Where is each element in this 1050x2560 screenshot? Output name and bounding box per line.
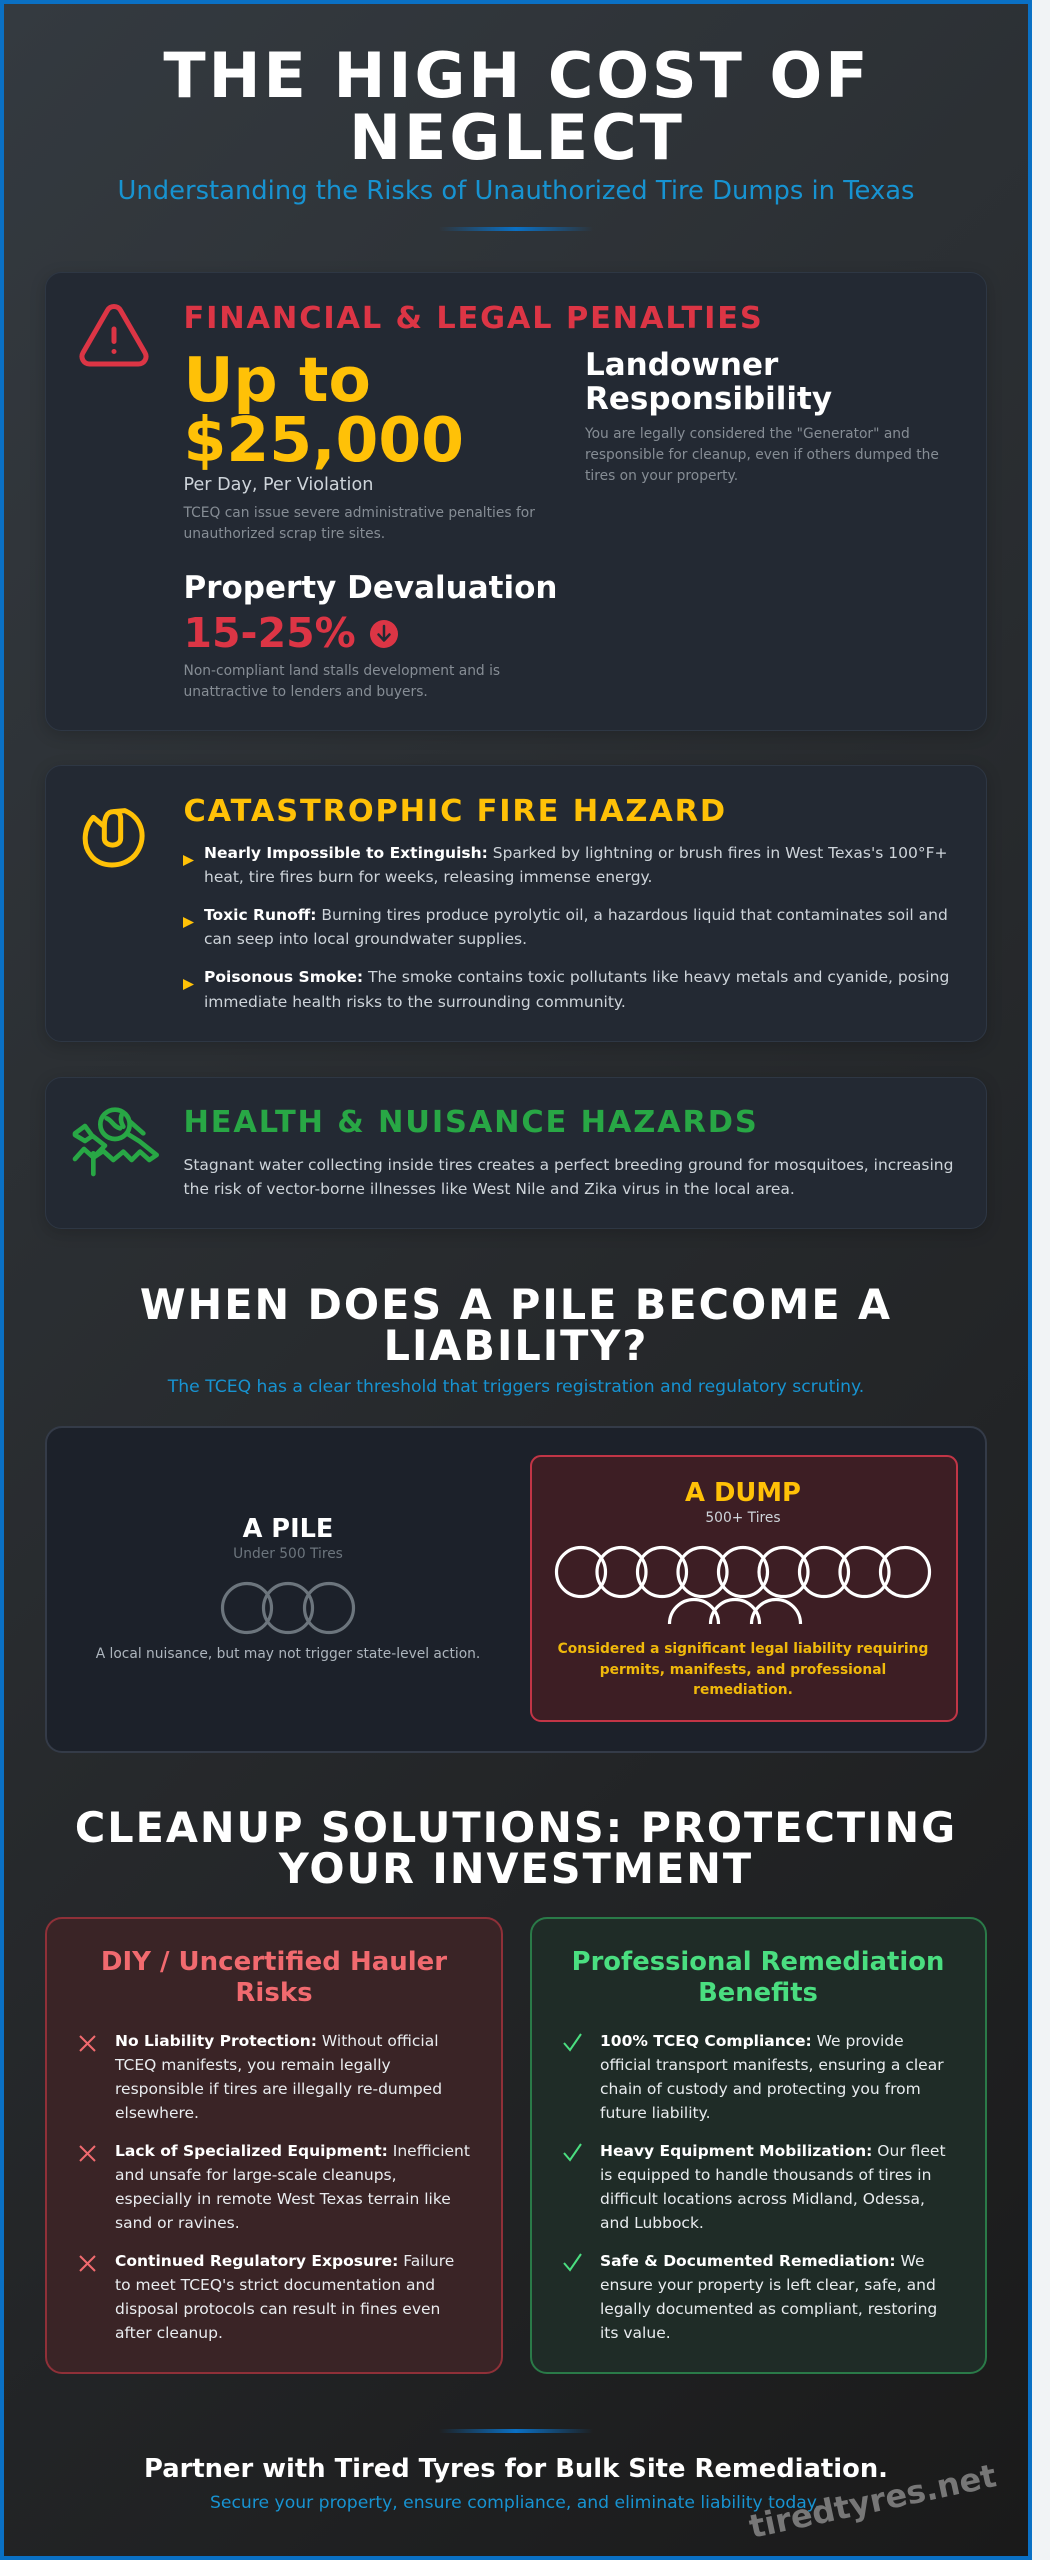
heading: financial and legal penalties: FINANCIAL & LEGAL PENALTIES bbox=[184, 301, 764, 336]
title bbox=[163, 39, 871, 174]
bullet: poisonous smoke bbox=[183, 968, 949, 1011]
subheading: threshold: The TCEQ has a clear threshold that triggers registration and regulatory scrutiny. bbox=[167, 1377, 864, 1397]
heading: professional benefits: Benefits bbox=[698, 1978, 818, 2008]
icon: mosquito habitat bbox=[75, 1110, 157, 1174]
column: a dump bbox=[531, 1456, 957, 1721]
icon: three tires bbox=[222, 1584, 354, 1632]
text: TCEQ penalties: TCEQ can issue severe administrative penalties for bbox=[182, 505, 535, 521]
text: landowner explanation bbox=[584, 426, 939, 484]
item: safe and documented remediation: legally documented as compliant, restoring bbox=[600, 2300, 937, 2318]
text: TCEQ penalties: unauthorized scrap tire sites. bbox=[184, 526, 385, 542]
label: per day per violation: Per Day, Per Violation bbox=[184, 475, 373, 495]
panel: catastrophic fire hazard bbox=[45, 766, 987, 1046]
item: safe and documented remediation bbox=[564, 2252, 937, 2342]
heading: property devaluation: Property Devaluation bbox=[184, 570, 557, 606]
heading: catastrophic fire hazard: CATASTROPHIC FIRE HAZARD bbox=[184, 794, 727, 829]
item: 100 percent TCEQ compliance: official transport manifests, ensuring a clear bbox=[600, 2056, 944, 2074]
heading: DIY risks: DIY / Uncertified Hauler bbox=[101, 1947, 447, 1977]
bullet: nearly impossible to extinguish: Nearly Impossible to Extinguish: Sparked by lightning or brush fires in West Texas's 100°F+ bbox=[204, 844, 947, 862]
panel: pile versus dump comparison bbox=[46, 1427, 986, 1752]
text: landowner explanation: tires on your property. bbox=[585, 468, 738, 484]
heading: landowner responsibility: Landowner bbox=[585, 347, 779, 383]
item: no liability protection bbox=[80, 2032, 442, 2122]
heading: health and nuisance hazards: HEALTH & NUISANCE HAZARDS bbox=[184, 1105, 759, 1140]
text: devaluation explanation bbox=[184, 663, 500, 700]
item: 100 percent TCEQ compliance bbox=[564, 2032, 944, 2122]
heading: cleanup solutions: YOUR INVESTMENT bbox=[278, 1845, 753, 1893]
text: devaluation explanation: unattractive to lenders and buyers. bbox=[184, 684, 428, 700]
item: no liability protection: elsewhere. bbox=[115, 2104, 199, 2122]
title: NEGLECT bbox=[349, 101, 685, 174]
column: a dump: A DUMP bbox=[685, 1478, 801, 1508]
text: landowner explanation: responsible for cleanup, even if others dumped the bbox=[585, 447, 939, 463]
bullet: poisonous smoke: immediate health risks to the surrounding community. bbox=[204, 993, 626, 1011]
stat: fine amount: Up to bbox=[184, 344, 371, 416]
item: continued regulatory exposure: after cleanup. bbox=[115, 2324, 223, 2342]
bullet: poisonous smoke: Poisonous Smoke: The smoke contains toxic pollutants like heavy metals and cyanide, posing bbox=[204, 968, 949, 986]
item: 100 percent TCEQ compliance: chain of custody and protecting you from bbox=[600, 2080, 921, 2098]
watermark: tiredtyres.net bbox=[746, 2456, 999, 2546]
item: lack of specialized equipment bbox=[80, 2142, 470, 2232]
heading: landowner responsibility: Responsibility bbox=[585, 381, 832, 417]
heading: when does a pile become a liability: WHEN DOES A PILE BECOME A bbox=[140, 1281, 892, 1329]
item: safe and documented remediation: Safe & Documented Remediation: We bbox=[600, 2252, 925, 2270]
column: a dump: 500+ Tires bbox=[705, 1510, 781, 1526]
bullet: toxic runoff: Toxic Runoff: Burning tires produce pyrolytic oil, a hazardous liquid that contaminates soil and bbox=[204, 906, 948, 924]
heading: professional benefits bbox=[572, 1947, 944, 2008]
item: continued regulatory exposure bbox=[80, 2252, 454, 2342]
title: THE HIGH COST OF bbox=[163, 39, 871, 112]
item: safe and documented remediation: ensure your property is left clear, safe, and bbox=[600, 2276, 936, 2294]
item: continued regulatory exposure: disposal protocols can result in fines even bbox=[115, 2300, 440, 2318]
bullet: toxic runoff: can seep into local groundwater supplies. bbox=[204, 930, 527, 948]
item: heavy equipment mobilization: Heavy Equipment Mobilization: Our fleet bbox=[600, 2142, 946, 2160]
footer subheading: Secure your property, ensure compliance, and eliminate liability today. bbox=[210, 2493, 820, 2513]
item: heavy equipment mobilization: is equipped to handle thousands of tires in bbox=[600, 2166, 931, 2184]
text: stagnant water bbox=[184, 1156, 953, 1198]
item: lack of specialized equipment: Lack of Specialized Equipment: Inefficient bbox=[115, 2142, 470, 2160]
panel: financial and legal penalties bbox=[45, 272, 987, 735]
stat: fine amount: $25,000 bbox=[184, 404, 464, 476]
heading: landowner responsibility bbox=[585, 347, 832, 417]
item: heavy equipment mobilization bbox=[564, 2142, 946, 2232]
heading: professional benefits: Professional Remediation bbox=[572, 1947, 944, 1977]
item: no liability protection: responsible if tires are illegally re-dumped bbox=[115, 2080, 442, 2098]
text: stagnant water: the risk of vector-borne illnesses like West Nile and Zika virus in the local area. bbox=[184, 1180, 795, 1198]
item: heavy equipment mobilization: and Lubbock. bbox=[600, 2214, 704, 2232]
text: dump liability: remediation. bbox=[693, 1682, 793, 1698]
text: devaluation explanation: Non-compliant land stalls development and is bbox=[184, 663, 500, 679]
heading: cleanup solutions: CLEANUP SOLUTIONS: PROTECTING bbox=[75, 1804, 957, 1852]
item: 100 percent TCEQ compliance: 100% TCEQ Compliance: We provide bbox=[600, 2032, 904, 2050]
item: no liability protection: TCEQ manifests, you remain legally bbox=[114, 2056, 391, 2074]
text: dump liability bbox=[558, 1641, 928, 1698]
icon: down arrow circle bbox=[370, 620, 398, 648]
heading: DIY risks bbox=[101, 1947, 447, 2008]
column: a pile: A PILE bbox=[243, 1514, 333, 1544]
heading: when does a pile become a liability bbox=[140, 1281, 892, 1370]
stat: fine amount bbox=[184, 344, 464, 476]
subtitle: Understanding the Risks of Unauthorized Tire Dumps in Texas bbox=[118, 176, 914, 206]
text: TCEQ penalties bbox=[182, 505, 535, 542]
bullet: nearly impossible to extinguish: heat, tire fires burn for weeks, releasing immense energy. bbox=[204, 868, 652, 886]
item: heavy equipment mobilization: difficult locations across Midland, Odessa, bbox=[600, 2190, 925, 2208]
icon: many tires bbox=[556, 1548, 930, 1624]
item: lack of specialized equipment: and unsafe for large-scale cleanups, bbox=[115, 2166, 397, 2184]
item: safe and documented remediation: its value. bbox=[600, 2324, 671, 2342]
column: a pile: A local nuisance, but may not trigger state-level action. bbox=[96, 1646, 480, 1662]
heading: DIY risks: Risks bbox=[235, 1978, 313, 2008]
column: a pile bbox=[96, 1514, 480, 1662]
bullet: nearly impossible to extinguish bbox=[183, 844, 947, 886]
panel: professional remediation benefits bbox=[531, 1918, 986, 2373]
item: lack of specialized equipment: sand or ravines. bbox=[115, 2214, 240, 2232]
panel: DIY risks bbox=[46, 1918, 502, 2373]
heading: when does a pile become a liability: LIABILITY? bbox=[384, 1322, 648, 1370]
column: a pile: Under 500 Tires bbox=[233, 1546, 343, 1562]
text: dump liability: Considered a significant legal liability requiring bbox=[558, 1641, 928, 1657]
panel: health and nuisance hazards bbox=[45, 1078, 987, 1233]
icon: warning triangle bbox=[82, 307, 146, 364]
stat: devaluation percent: 15-25% bbox=[184, 609, 356, 657]
heading: cleanup solutions bbox=[75, 1804, 957, 1893]
item: lack of specialized equipment: especially in remote West Texas terrain like bbox=[115, 2190, 451, 2208]
text: dump liability: permits, manifests, and professional bbox=[600, 1662, 886, 1678]
item: continued regulatory exposure: Continued Regulatory Exposure: Failure bbox=[115, 2252, 454, 2270]
icon: fire bbox=[85, 811, 142, 865]
footer heading: Partner with Tired Tyres for Bulk Site Remediation. bbox=[144, 2454, 888, 2484]
item: 100 percent TCEQ compliance: future liability. bbox=[600, 2104, 711, 2122]
text: stagnant water: Stagnant water collecting inside tires creates a perfect breeding ground for mosquitoes, increasing bbox=[184, 1156, 953, 1174]
item: no liability protection: No Liability Protection: Without official bbox=[115, 2032, 439, 2050]
text: landowner explanation: You are legally considered the "Generator" and bbox=[584, 426, 910, 442]
bullet: toxic runoff bbox=[183, 906, 948, 948]
item: continued regulatory exposure: to meet TCEQ's strict documentation and bbox=[115, 2276, 435, 2294]
